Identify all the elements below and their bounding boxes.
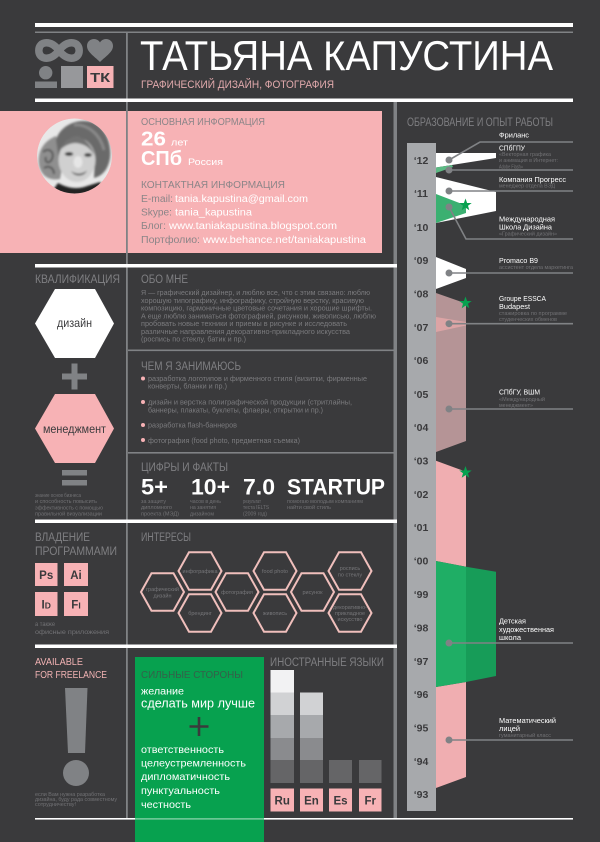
text: about: А еще люблю заниматься фотографией, рисунком, живописью, люблю: [141, 312, 376, 320]
contact list: E-mail:: [141, 194, 173, 205]
language labels: Fr: [364, 796, 376, 808]
panel: software: [35, 532, 117, 636]
label: Groupe ESSCA: стажировка по программе: [499, 311, 567, 317]
city: СПб: [141, 147, 182, 170]
fact captions: на занятия: [190, 505, 216, 511]
year scale: ‘03: [414, 456, 428, 468]
panel: freelance: [35, 656, 117, 808]
label: Groupe ESSCA: [499, 294, 567, 323]
fact captions: часов в день: [190, 499, 221, 505]
heading: contacts: КОНТАКТНАЯ ИНФОРМАЦИЯ: [141, 179, 285, 191]
software badges: [35, 563, 88, 616]
logo icons: [35, 39, 114, 88]
fact captions: найти свой стиль: [287, 504, 331, 511]
hexagon: management: [35, 394, 114, 463]
heading: interests: ИНТЕРЕСЫ: [141, 532, 191, 544]
contact list: www.behance.net/taniakapustina: [202, 235, 366, 246]
fact captions: теста IELTS: [243, 505, 269, 511]
label: SPbGU: «Международный: [499, 396, 545, 403]
software badges: FI: [71, 600, 81, 612]
bullets: [141, 376, 145, 442]
fact numbers: 10+: [191, 474, 230, 500]
hexagon: photography: [216, 573, 258, 611]
fact captions: дипломного: [141, 505, 172, 511]
panel: what I do: [141, 361, 367, 445]
heading: freelance: [35, 656, 107, 681]
text: about: пробовать новые техники и приемы в рисунке и исследовать: [141, 319, 347, 328]
fact captions: проекта (МЭД): [141, 512, 179, 518]
text: about: хорошую типографику, инфографику, стройную верстку, красивую: [141, 296, 364, 305]
hexagon: glass painting: роспись: [340, 566, 360, 572]
city: Россия: [188, 157, 223, 168]
heading: software: ПРОГРАММАМИ: [35, 546, 117, 558]
strengths list: честность: [141, 799, 192, 811]
fact captions: дизайном: [190, 510, 214, 518]
software badges: Ai: [70, 570, 82, 582]
year scale: ‘11: [414, 188, 428, 200]
hexagon: infographics: [178, 552, 222, 590]
strengths list: [141, 744, 247, 811]
language labels: Ru: [275, 796, 290, 808]
text: about: (роспись по стеклу, батик и пр.): [141, 334, 246, 344]
contact list: tania_kapustina: [175, 208, 252, 218]
hexagon: decorative art: прикладное: [335, 611, 365, 617]
hexagon: decorative art: искусство: [338, 617, 362, 623]
heading: freelance: AVAILABLE: [35, 656, 83, 668]
list: [148, 374, 367, 445]
label: Progress company: Компания Прогресс: [499, 175, 566, 184]
label: art school: Детская: [499, 616, 526, 626]
year scale: ‘05: [414, 389, 428, 401]
contact list: tania.kapustina@gmail.com: [175, 194, 308, 205]
year scale: [407, 143, 436, 811]
note: правильной визуализации: [35, 510, 102, 518]
label: SPbGU: [499, 388, 545, 409]
icon: heart: [87, 39, 113, 62]
icon: exclamation mark: [63, 688, 89, 786]
icon: plus: [62, 364, 87, 390]
label: SPbGU: менеджмент»: [499, 403, 533, 409]
text: about: композицию, гармоничные цветовые сочетания и хорошие шрифты.: [141, 304, 372, 312]
hexagon: branding: брендинг: [188, 611, 212, 617]
portrait photo: [37, 118, 112, 197]
icon: person: [35, 66, 57, 88]
fact captions: результат: [243, 499, 261, 505]
hexagon: graphic design: графический: [146, 586, 179, 593]
fact captions: [141, 499, 363, 518]
fact captions: (2009 год): [243, 512, 267, 518]
hexagon: glass painting: по стеклу: [338, 572, 362, 578]
year scale: ‘94: [414, 756, 428, 768]
year scale: ‘07: [414, 322, 428, 334]
heading: freelance: FOR FREELANCE: [35, 669, 107, 681]
label: SPbGPU: [499, 144, 558, 170]
year scale: ‘93: [414, 789, 428, 801]
bar chart: language levels: [270, 670, 382, 783]
panel: pink info background: [0, 111, 382, 253]
heading: qualification: КВАЛИФИКАЦИЯ: [35, 274, 120, 286]
hexagon: photography: фотография: [221, 590, 253, 596]
hexagon: glass painting: [328, 552, 372, 590]
hexagon: design: дизайн: [57, 316, 92, 330]
label: art school: художественная: [499, 625, 554, 634]
label: freelance: Фриланс: [499, 130, 529, 140]
list: баннеры, плакаты, буклеты, флаеры, открытки и пр.): [148, 406, 323, 414]
list: дизайн и верстка полиграфической продукции (стритлайны,: [148, 398, 352, 406]
note: [35, 493, 103, 518]
panel: strengths: [141, 669, 255, 811]
heading: software: [35, 532, 117, 558]
language labels: Es: [333, 796, 348, 808]
label: international design school: «Графический дизайн»: [499, 230, 557, 238]
note: office: офисные приложения: [35, 629, 110, 636]
year scale: ‘02: [414, 489, 428, 501]
panel: timeline: [407, 117, 573, 811]
label: SPbGU: СПбГУ, ВШМ: [499, 388, 540, 396]
hexagon: design: [35, 289, 114, 358]
year scale: ‘08: [414, 288, 428, 300]
label: SPbGPU: СПбГПУ: [499, 144, 525, 152]
hexagon: decorative art: [328, 594, 372, 632]
icon: grey square: [61, 66, 83, 88]
icon: dark plus: [190, 717, 208, 736]
list: разработка flash-баннеров: [148, 420, 237, 430]
hexagon: food photo: [254, 552, 296, 590]
software badges: ID: [42, 600, 51, 612]
hexagon: drawing: [291, 573, 334, 611]
label: math lyceum: [499, 716, 556, 739]
label: SPbGPU: «Векторная графика: [499, 152, 551, 158]
note: freelance: [35, 792, 117, 808]
list: конверты, бланки и пр.): [148, 382, 227, 390]
note: office: а также: [35, 621, 55, 628]
panel: qualification: [35, 274, 120, 518]
heading: strengths: СИЛЬНЫЕ СТОРОНЫ: [141, 669, 243, 681]
fact captions: за защиту: [141, 499, 166, 505]
label: Groupe ESSCA: Groupe ESSCA: [499, 294, 546, 303]
year scale: ‘99: [414, 589, 428, 601]
label: math lyceum: гуманитарный класс: [499, 732, 551, 739]
text: about: Я — графический дизайнер, и люблю все, что с этим связано: люблю: [141, 288, 370, 297]
hexagon: drawing: рисунок: [302, 590, 323, 596]
label: Progress company: [499, 175, 566, 190]
note: freelance: дизайна, буду рада совместному: [35, 796, 117, 803]
label: international design school: Международная: [499, 214, 555, 224]
contact list: [141, 194, 366, 246]
label: SPbGPU: Adobe Flash»: [499, 164, 523, 170]
year scale: ‘00: [414, 556, 428, 568]
heading: software: ВЛАДЕНИЕ: [35, 532, 90, 544]
age: 26: [141, 128, 166, 150]
label: Promaco B9: Promaco B9: [499, 256, 538, 265]
subtitle: ГРАФИЧЕСКИЙ ДИЗАЙН, ФОТОГРАФИЯ: [141, 78, 334, 91]
note: office: [35, 621, 110, 636]
hexagon: painting: [254, 594, 296, 632]
icon: star 2008: [459, 296, 472, 308]
slogan: сделать мир лучше: [141, 696, 255, 710]
connectors: [446, 142, 573, 744]
contact list: www.taniakapustina.blogspot.com: [168, 221, 337, 232]
icon: TK monogram: ТК: [90, 71, 111, 85]
label: SPbGPU: и анимация в Интернет:: [499, 158, 558, 164]
note: freelance: сотрудничеству!: [35, 802, 76, 808]
icon: equals: [62, 470, 87, 486]
label: Promaco B9: [499, 256, 573, 271]
label: Groupe ESSCA: студенческих обменов: [499, 317, 557, 323]
label: Progress company: менеджер отдела ВЭД: [499, 184, 555, 190]
label: international design school: [499, 214, 557, 238]
contact list: Блог:: [141, 221, 166, 232]
note: эффективность с помощью: [35, 506, 103, 512]
fact numbers: 7.0: [243, 474, 275, 500]
heading: what I do: ЧЕМ Я ЗАНИМАЮСЬ: [141, 361, 241, 373]
year scale: ‘09: [414, 255, 428, 267]
hexagon: management: менеджмент: [43, 422, 106, 436]
list: фотография (food photo, предметная съемка): [148, 436, 300, 445]
icon: star 2003: [459, 466, 472, 478]
label: art school: школа: [499, 633, 522, 642]
note: freelance: если Вам нужна разработка: [35, 792, 105, 798]
year scale: ‘98: [414, 622, 428, 634]
heading: education and experience: ОБРАЗОВАНИЕ И ОПЫТ РАБОТЫ: [407, 117, 553, 129]
label: math lyceum: лицей: [499, 724, 520, 733]
label: international design school: Школа Дизайна: [499, 222, 553, 232]
fact captions: помогаю молодым компаниям: [287, 499, 363, 505]
hexagon: graphic design: [141, 573, 184, 611]
language labels: En: [304, 796, 319, 808]
label: art school: [499, 616, 554, 642]
text: about: различные направления декоративно-прикладного искусства: [141, 327, 351, 336]
contact list: Skype:: [141, 208, 172, 218]
slogan: [141, 686, 255, 710]
label: math lyceum: Математический: [499, 716, 556, 725]
year scale: ‘97: [414, 656, 428, 668]
label: Promaco B9: ассистент отдела маркетинга: [499, 265, 573, 271]
note: и способность повысить: [35, 499, 97, 505]
software badges: Ps: [39, 570, 53, 582]
hexagon: painting: живопись: [263, 611, 287, 617]
language labels: [270, 788, 382, 812]
heading: facts: ЦИФРЫ И ФАКТЫ: [141, 462, 228, 474]
hexagon: branding: [178, 594, 222, 632]
list: разработка логотипов и фирменного стиля (визитки, фирменные: [148, 374, 367, 383]
hexagon: graphic design: дизайн: [154, 592, 171, 600]
strengths list: ответственность: [141, 744, 225, 756]
note: знание основ бизнеса: [35, 493, 81, 499]
heading: basic info: ОСНОВНАЯ ИНФОРМАЦИЯ: [141, 116, 265, 128]
year scale: ‘96: [414, 689, 428, 701]
hexagon: decorative art: декоративно-: [333, 605, 367, 611]
contact list: Портфолио:: [141, 234, 200, 246]
year scale: ‘10: [414, 222, 428, 234]
city: [141, 147, 223, 170]
hexagon: infographics: инфографика: [182, 569, 218, 575]
label: Groupe ESSCA: Budapest: [499, 302, 531, 311]
fact numbers: 5+: [141, 474, 168, 500]
heading: about: ОБО МНЕ: [141, 274, 188, 286]
slogan: желание: [141, 686, 184, 698]
year scale: ‘01: [414, 522, 428, 534]
panel: green strengths background: [135, 657, 264, 842]
panel: languages: [270, 657, 384, 812]
panel: basic info: [141, 116, 366, 246]
age: [141, 128, 188, 150]
icon: infinity: [39, 43, 79, 58]
year scale: ‘12: [414, 155, 428, 167]
timeline bands: [436, 153, 496, 788]
strengths list: дипломатичность: [141, 771, 231, 783]
fact numbers: STARTUP: [287, 474, 385, 500]
panel: facts: [141, 462, 385, 518]
strengths list: пунктуальность: [141, 785, 221, 797]
year scale: ‘06: [414, 355, 428, 367]
hexagon: food photo: food photo: [262, 569, 288, 575]
fact numbers: [141, 474, 385, 500]
text: about: [141, 288, 376, 344]
year scale: ‘95: [414, 722, 428, 734]
panel: about me: [141, 274, 376, 344]
age: лет: [171, 138, 188, 148]
icon: star 2011: [459, 198, 472, 210]
title: ТАТЬЯНА КАПУСТИНА: [140, 32, 553, 79]
heading: languages: ИНОСТРАННЫЕ ЯЗЫКИ: [270, 657, 384, 669]
year scale: ‘04: [414, 422, 428, 434]
panel: interests: [141, 532, 372, 632]
strengths list: целеустремленность: [141, 758, 247, 770]
